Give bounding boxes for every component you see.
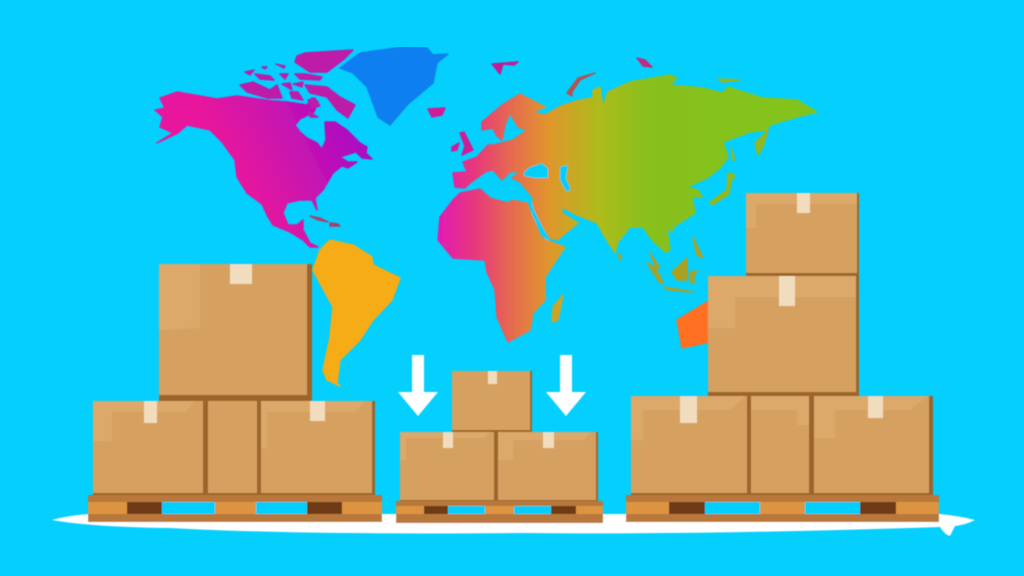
arctic russian islands [637, 58, 652, 67]
great britain and ireland [452, 132, 473, 155]
left pile bottom box 1 [93, 401, 208, 495]
cuba and caribbean [310, 216, 340, 226]
continent: north america [155, 92, 372, 247]
right pile lower box [708, 276, 859, 396]
middle pile bottom box 1 [400, 432, 498, 501]
greenland [340, 47, 448, 125]
left pile top box [159, 264, 312, 401]
iceland [428, 108, 445, 117]
eurasia [453, 75, 817, 253]
canadian arctic islands [240, 50, 355, 118]
left pallet stack [88, 264, 382, 522]
red sea [531, 200, 549, 240]
right pile bottom box 3 [814, 396, 933, 495]
black sea [524, 163, 548, 178]
left pile bottom box 3 [261, 401, 375, 495]
right pallet stack [626, 193, 939, 522]
arrow: left down [398, 355, 438, 416]
middle pallet [396, 501, 603, 523]
middle pile top box [452, 371, 532, 432]
right pallet [626, 495, 939, 522]
right pile upper box [746, 193, 859, 276]
australia [677, 298, 720, 348]
world map [155, 47, 817, 386]
illustration content [52, 47, 975, 536]
africa [438, 189, 565, 342]
japan, sakhalin and kamchatka [710, 79, 768, 205]
right pile bottom box 1 [631, 396, 751, 495]
novaya zemlya [567, 73, 595, 96]
south america [313, 240, 400, 386]
right pile bottom box 2 [751, 396, 814, 495]
middle pile bottom box 2 [498, 432, 598, 501]
caspian sea [560, 165, 571, 191]
ground ellipse [52, 514, 975, 536]
left pallet [88, 495, 382, 522]
middle pallet stack [396, 371, 603, 523]
arrow: right down [546, 355, 586, 416]
svalbard [492, 62, 518, 74]
southeast asian islands [618, 237, 703, 292]
madagascar [552, 295, 563, 322]
left pile bottom box 2 [208, 401, 261, 495]
